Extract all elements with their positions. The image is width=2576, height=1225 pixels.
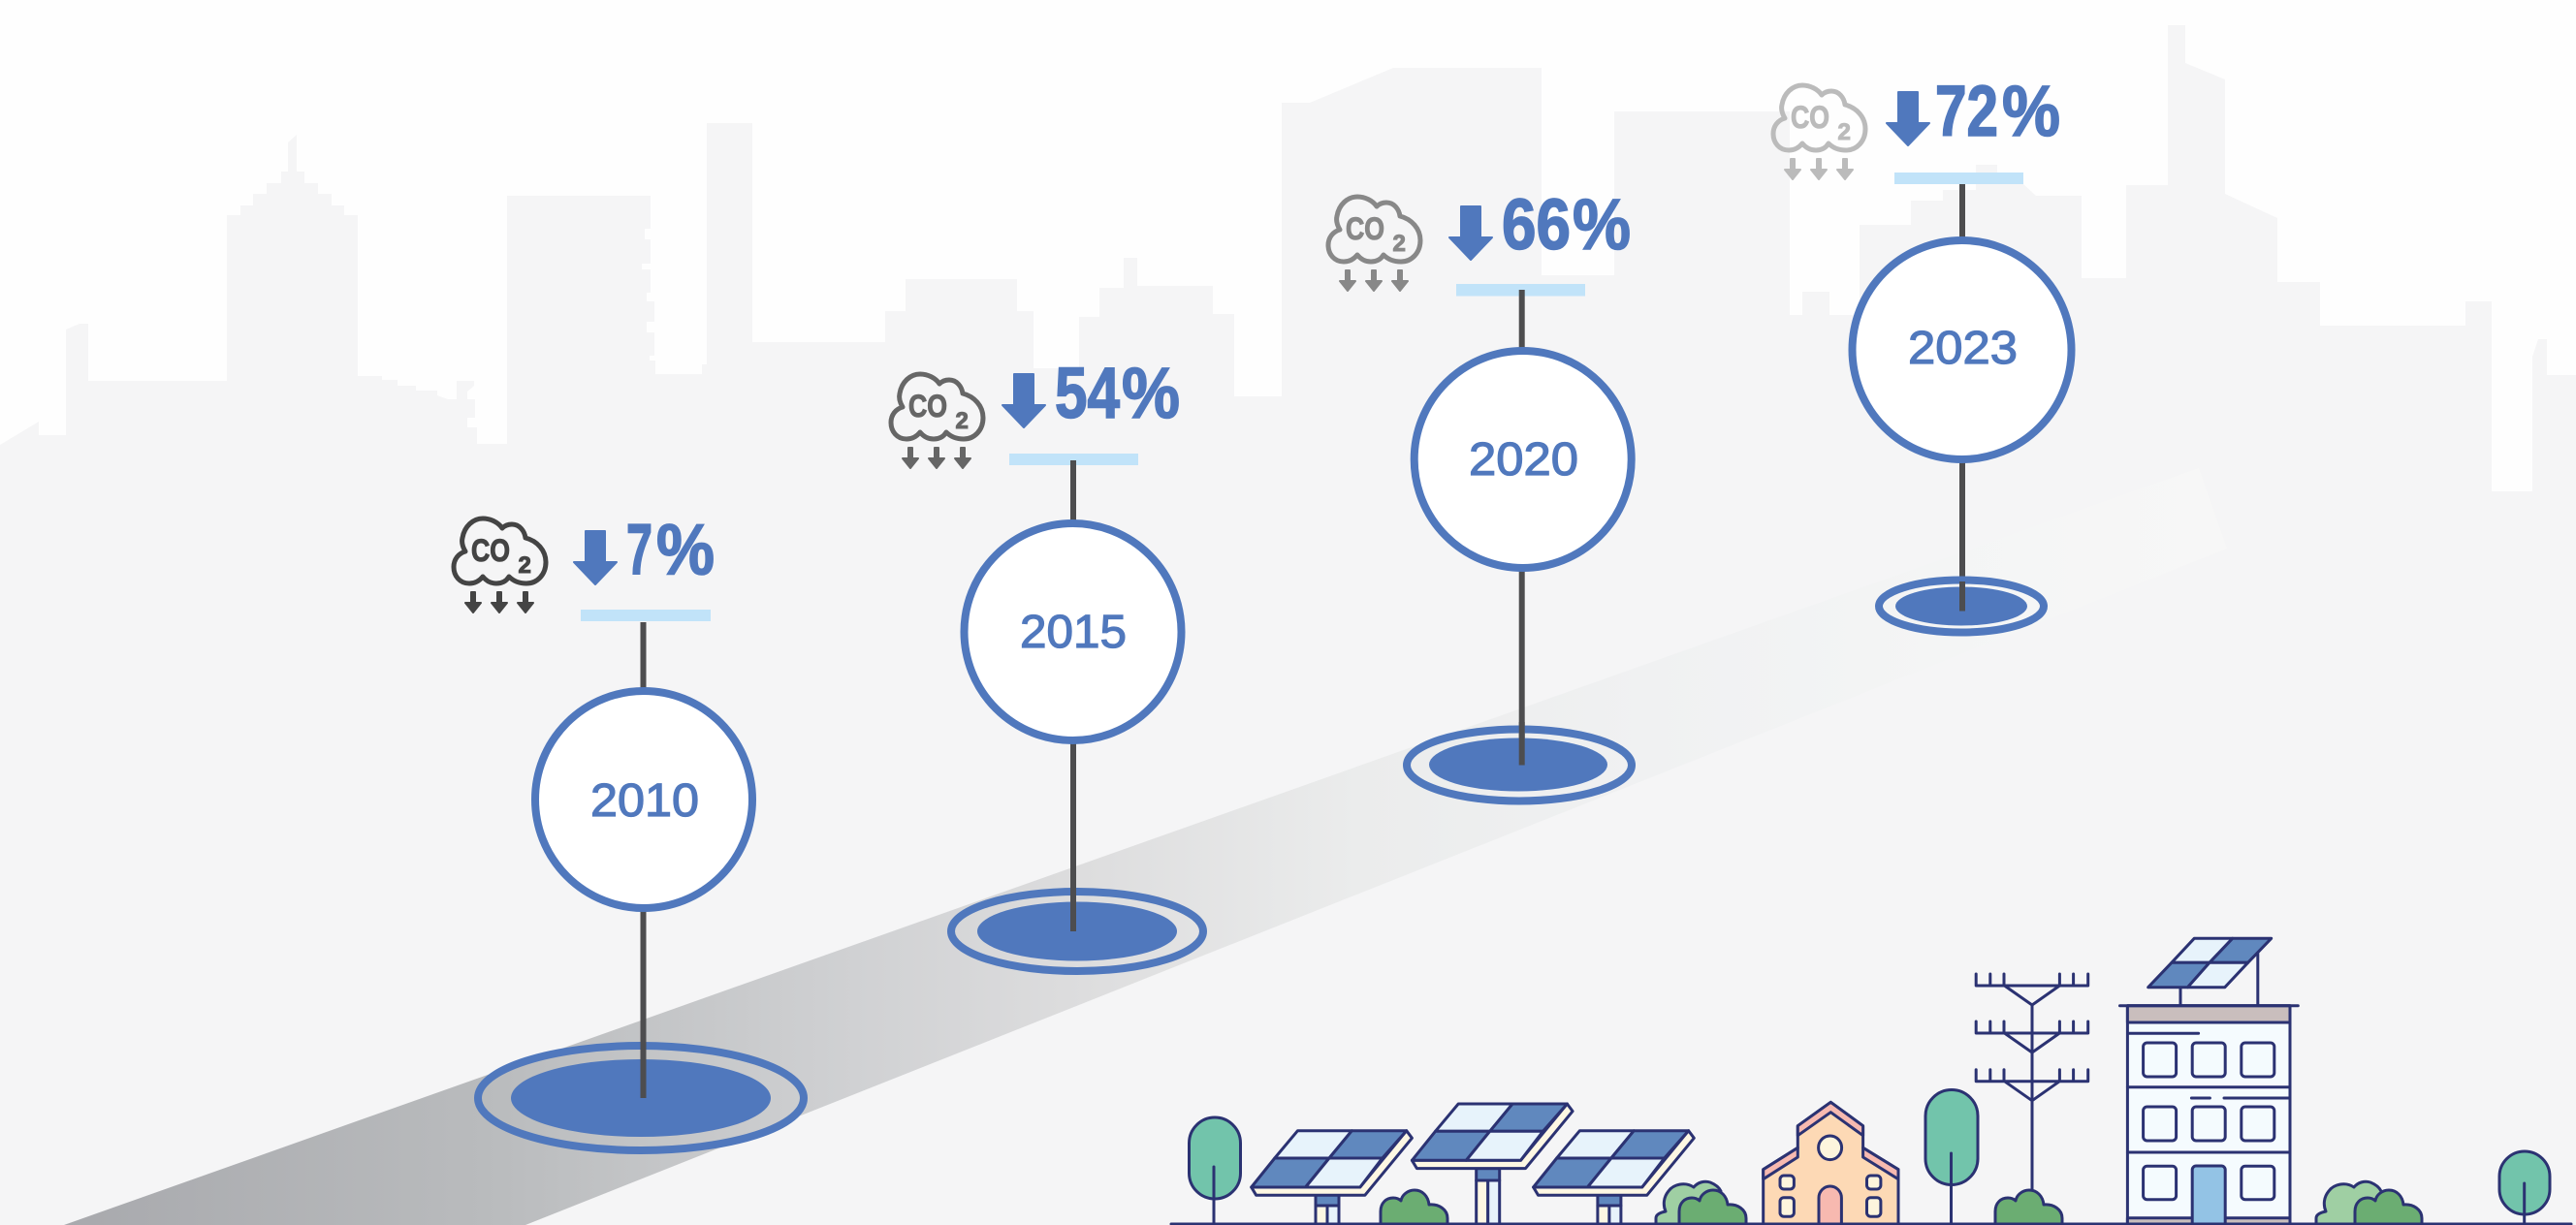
percentage 7%: % — [656, 510, 715, 589]
bush pair 2 — [2316, 1181, 2422, 1224]
percentage 54%: % — [1122, 353, 1180, 433]
icon: co2 cloud 2020 — [1328, 197, 1420, 291]
marker 2015 — [891, 353, 1203, 971]
rooftop solar panel — [2148, 938, 2272, 1006]
door — [2192, 1166, 2225, 1225]
ground line — [1171, 1223, 2571, 1225]
percentage 72%: 72 — [1935, 71, 1998, 151]
pole 2020 — [1519, 290, 1525, 766]
year circle 2020 — [1415, 351, 1632, 568]
tree middle — [1925, 1089, 1978, 1224]
icon: co2 cloud 2015: 2 — [956, 408, 969, 434]
bush 1 — [1381, 1190, 1447, 1224]
big down arrow 2015 — [1002, 374, 1045, 427]
pole 2015 — [1070, 460, 1076, 931]
year circle 2015: 2015 — [1020, 607, 1127, 658]
ground disc 2023 — [1879, 580, 2044, 632]
marker 2010 — [454, 510, 804, 1150]
solar panel 3 — [1534, 1131, 1694, 1224]
bush pair 1 — [1656, 1181, 1746, 1224]
icon: co2 cloud 2015: CO — [908, 389, 947, 424]
road band — [64, 468, 2227, 1225]
ground disc 2010 — [478, 1027, 804, 1150]
year circle 2010 — [535, 691, 752, 908]
icon: co2 cloud 2023 — [1773, 85, 1865, 179]
percentage 72%: % — [2002, 71, 2060, 151]
big down arrow 2023 — [1887, 92, 1929, 145]
solar panel 1 — [1252, 1131, 1412, 1224]
solar panel 2 — [1412, 1104, 1573, 1224]
power pole — [1976, 974, 2088, 1202]
light blue bar 2023 — [1894, 173, 2023, 184]
house — [1764, 1102, 1898, 1224]
icon: co2 cloud 2023: CO — [1791, 100, 1829, 135]
percentage 66% — [1502, 184, 1631, 265]
year circle 2010: 2010 — [590, 775, 699, 827]
year circle 2023: 2023 — [1908, 323, 2018, 374]
percentage 72% — [1935, 71, 2060, 151]
icon: co2 cloud 2023: 2 — [1838, 119, 1851, 145]
bush 2 — [1995, 1190, 2062, 1224]
big down arrow 2010 — [574, 531, 617, 584]
light blue bar 2010 — [581, 610, 711, 621]
marker 2023 — [1773, 71, 2071, 632]
icon: co2 cloud 2010: 2 — [518, 552, 531, 579]
percentage 66%: 66 — [1502, 184, 1571, 265]
percentage 7%: 7 — [626, 510, 652, 589]
tree right — [2499, 1151, 2550, 1224]
big down arrow 2020 — [1449, 206, 1492, 260]
ground disc 2020 — [1407, 722, 1632, 801]
year circle 2023 — [1852, 240, 2071, 459]
light blue bar 2020 — [1456, 284, 1585, 297]
year circle 2020: 2020 — [1469, 434, 1578, 486]
marker 2020 — [1328, 184, 1632, 801]
building with rooftop solar panel — [2119, 938, 2298, 1225]
pole 2010 — [640, 622, 646, 1098]
light blue bar 2015 — [1009, 454, 1138, 465]
percentage 54% — [1055, 353, 1180, 433]
icon: co2 cloud 2010 — [454, 518, 546, 612]
icon: co2 cloud 2020: CO — [1346, 211, 1384, 246]
icon: co2 cloud 2015 — [891, 374, 983, 468]
percentage 7% — [626, 510, 715, 589]
icon: co2 cloud 2020: 2 — [1392, 231, 1406, 257]
tree left — [1189, 1117, 1241, 1224]
pole 2023 — [1959, 184, 1965, 611]
year circle 2015 — [964, 523, 1181, 740]
green town illustration — [1171, 938, 2571, 1225]
percentage 66%: % — [1573, 184, 1631, 265]
ground disc 2015 — [951, 872, 1203, 971]
percentage 54%: 54 — [1055, 353, 1120, 433]
icon: co2 cloud 2010: CO — [471, 533, 510, 568]
